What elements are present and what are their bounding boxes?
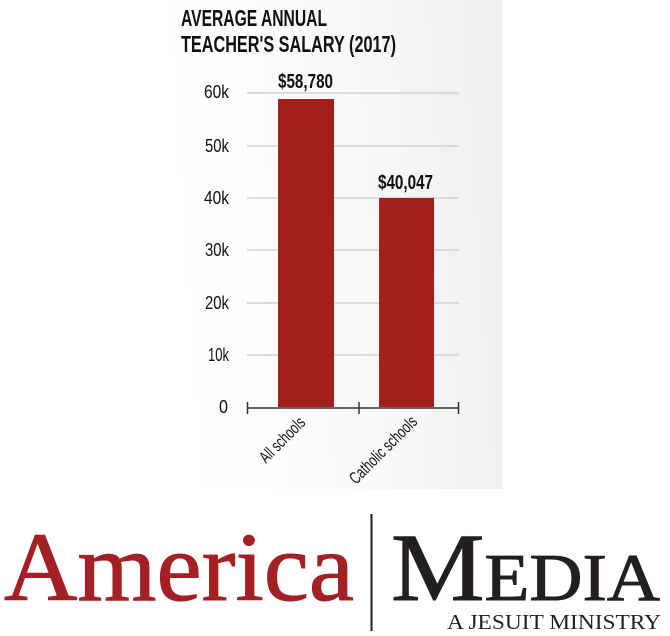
x axis label: All schools: All schools <box>255 413 309 467</box>
value label: All schools: $58,780 <box>278 71 333 93</box>
y axis labels: 50k <box>205 136 230 156</box>
gridlines <box>247 93 459 355</box>
logo: America: America <box>4 514 354 621</box>
logo tagline: A JESUIT MINISTRY <box>447 610 661 634</box>
title: AVERAGE ANNUAL <box>181 5 327 31</box>
title <box>181 5 396 57</box>
panel: chart background <box>161 0 502 489</box>
y axis labels: 60k <box>204 82 230 102</box>
bar: All schools <box>278 71 334 407</box>
y axis labels: 40k <box>204 188 230 208</box>
title: TEACHER'S SALARY (2017) <box>181 31 396 57</box>
y axis labels: 10k <box>208 345 230 365</box>
y axis labels: 30k <box>205 240 230 260</box>
y axis labels: 20k <box>205 293 230 313</box>
logo: Media: MEDIA <box>391 514 660 621</box>
y axis labels <box>204 82 230 417</box>
x axis label: Catholic schools: Catholic schools <box>345 412 421 488</box>
x axis <box>247 402 458 414</box>
bar: Catholic schools <box>378 172 434 407</box>
value label: Catholic schools: $40,047 <box>378 172 433 194</box>
y axis labels: 0 <box>219 397 228 417</box>
logo divider <box>370 514 372 631</box>
